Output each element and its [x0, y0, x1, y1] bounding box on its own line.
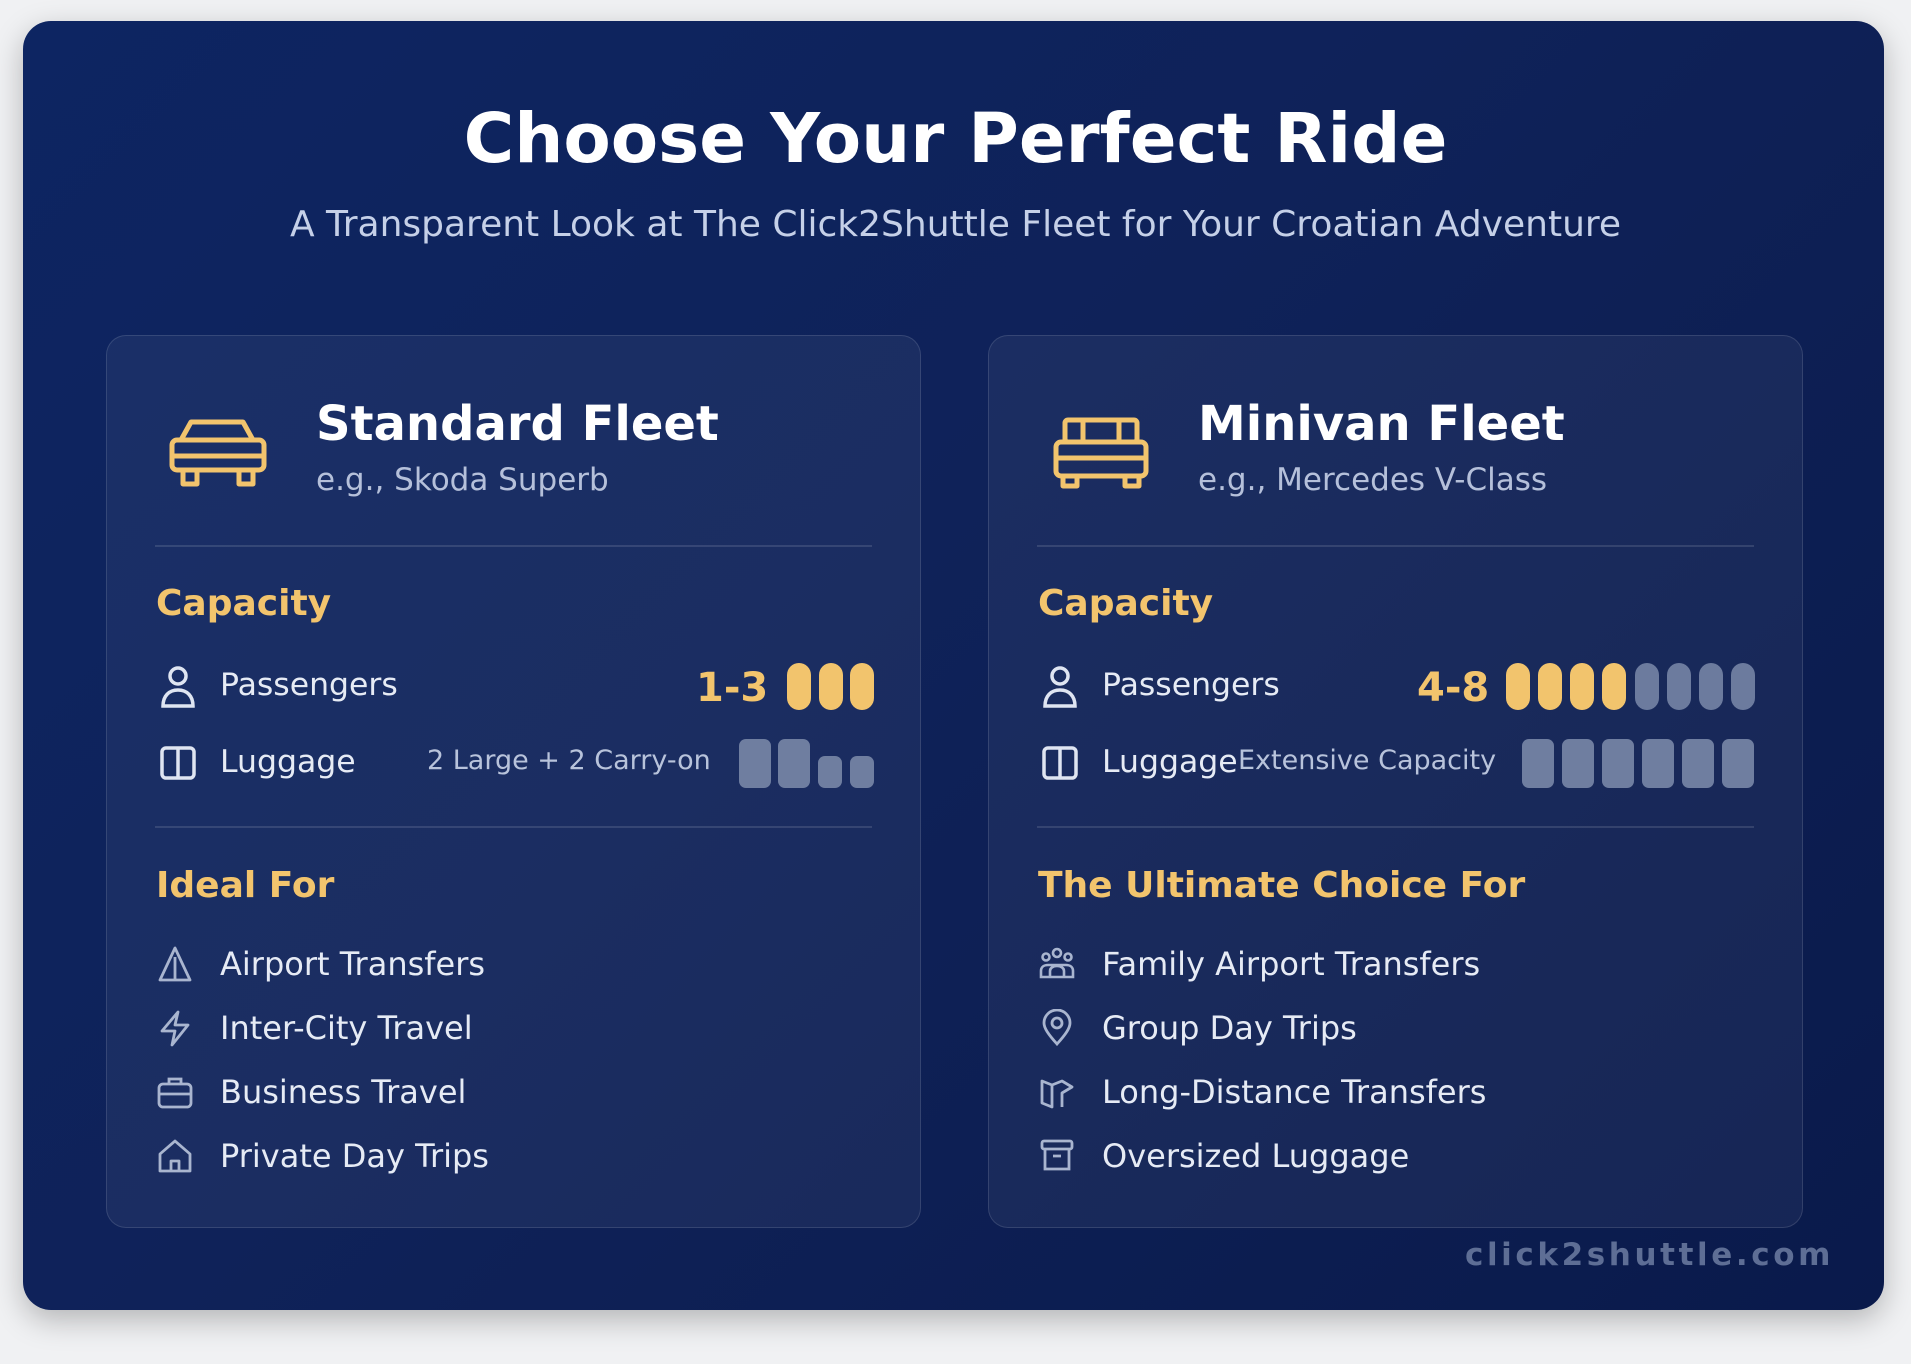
item: group day trips: Group Day Trips: [1102, 1009, 1357, 1047]
panel: standard fleet: [106, 335, 921, 1228]
row: passengers: [1043, 663, 1755, 711]
item: long-distance: Long-Distance Transfers: [1102, 1073, 1486, 1111]
row: passengers: Passengers: [220, 667, 398, 703]
heading: capacity: Capacity: [1038, 583, 1213, 624]
heading: capacity: Capacity: [156, 583, 331, 624]
item: private day trips: Private Day Trips: [220, 1137, 489, 1175]
item: family airport: Family Airport Transfers: [1102, 945, 1480, 983]
heading: standard fleet: Standard Fleet: [316, 396, 719, 452]
row: passengers: [161, 663, 874, 711]
subheading: e.g., Mercedes V-Class: [1198, 462, 1547, 498]
footer: website: click2shuttle.com: [1465, 1237, 1834, 1273]
row: passengers: Passengers: [1102, 667, 1280, 703]
list: ultimate choice: [1040, 945, 1486, 1175]
row: passengers: 1-3: [696, 665, 768, 711]
heading: ultimate choice: The Ultimate Choice For: [1038, 865, 1525, 906]
panel: minivan fleet: [988, 335, 1803, 1228]
subheading: e.g., Skoda Superb: [316, 462, 609, 498]
icon: minivan: [1054, 418, 1148, 488]
row: luggage: Luggage: [220, 744, 356, 780]
subtitle: A Transparent Look at The Click2Shuttle Fleet for Your Croatian Adventure: [290, 204, 1621, 245]
title: Choose Your Perfect Ride: [464, 99, 1447, 179]
icon: car: [170, 420, 266, 486]
heading: minivan fleet: Minivan Fleet: [1198, 396, 1565, 452]
item: oversized luggage: Oversized Luggage: [1102, 1137, 1409, 1175]
row: passengers: 4-8: [1417, 665, 1489, 711]
heading: ideal for: Ideal For: [156, 865, 334, 906]
row: luggage: Luggage: [1102, 744, 1238, 780]
item: inter-city: Inter-City Travel: [220, 1009, 473, 1047]
row: luggage: Extensive Capacity: [1238, 745, 1496, 776]
item: business: Business Travel: [220, 1073, 466, 1111]
item: airport transfers: Airport Transfers: [220, 945, 485, 983]
row: luggage: 2 Large + 2 Carry-on: [427, 745, 711, 776]
row: luggage: [1042, 739, 1754, 788]
row: luggage: [160, 739, 874, 788]
list: ideal for: [158, 945, 489, 1175]
